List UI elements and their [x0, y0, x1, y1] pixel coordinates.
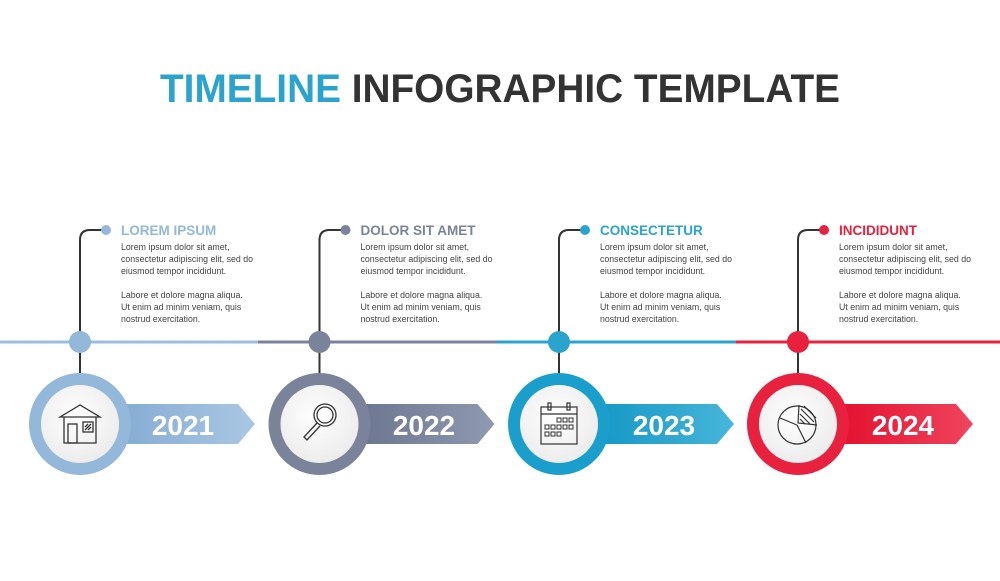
- heading: DOLOR SIT AMET: [360, 223, 476, 238]
- text block: Lorem ipsum dolor sit amet,: [839, 242, 948, 252]
- text block: Ut enim ad minim veniam, quis: [839, 302, 960, 312]
- text block: eiusmod tempor incididunt.: [600, 266, 705, 276]
- heading: CONSECTETUR: [600, 223, 703, 238]
- text block: eiusmod tempor incididunt.: [121, 266, 226, 276]
- text block: eiusmod tempor incididunt.: [839, 266, 944, 276]
- text block: Labore et dolore magna aliqua.: [121, 290, 243, 300]
- text block: nostrud exercitation.: [839, 314, 918, 324]
- step 4: 2024: 2024: [872, 410, 935, 441]
- text block: nostrud exercitation.: [600, 314, 679, 324]
- year banner: [120, 404, 255, 444]
- text block: nostrud exercitation.: [360, 314, 440, 324]
- text block: nostrud exercitation.: [121, 314, 200, 324]
- step 3: 2023: [508, 223, 734, 475]
- icon: magnifier: [304, 404, 336, 440]
- text block: consectetur adipiscing elit, sed do: [360, 254, 493, 264]
- text block: Labore et dolore magna aliqua.: [360, 290, 482, 300]
- year banner: [360, 404, 494, 444]
- year banner: [599, 404, 734, 444]
- text block: Labore et dolore magna aliqua.: [839, 290, 961, 300]
- text block: eiusmod tempor incididunt.: [360, 266, 466, 276]
- step 1: 2021: 2021: [152, 410, 214, 441]
- step 2: 2022: 2022: [393, 410, 455, 441]
- year banner: [838, 404, 973, 444]
- step 2: 2022: [268, 223, 494, 475]
- step 1: 2021: [29, 223, 255, 475]
- text block: consectetur adipiscing elit, sed do: [839, 254, 971, 264]
- step 3: 2023: 2023: [633, 410, 695, 441]
- heading: LOREM IPSUM: [121, 223, 216, 238]
- text block: consectetur adipiscing elit, sed do: [121, 254, 253, 264]
- text block: Lorem ipsum dolor sit amet,: [121, 242, 230, 252]
- step 4: 2024: [747, 223, 973, 475]
- icon: calendar: [541, 403, 577, 444]
- text block: consectetur adipiscing elit, sed do: [600, 254, 732, 264]
- text block: Ut enim ad minim veniam, quis: [600, 302, 721, 312]
- text block: Lorem ipsum dolor sit amet,: [360, 242, 469, 252]
- text block: Ut enim ad minim veniam, quis: [360, 302, 481, 312]
- text block: Ut enim ad minim veniam, quis: [121, 302, 242, 312]
- heading: INCIDIDUNT: [839, 223, 918, 238]
- icon: pie chart: [778, 405, 817, 444]
- icon: house: [60, 405, 100, 443]
- timeline line: [0, 340, 1000, 344]
- text block: Labore et dolore magna aliqua.: [600, 290, 722, 300]
- title: TIMELINE INFOGRAPHIC TEMPLATE: [160, 67, 840, 111]
- text block: Lorem ipsum dolor sit amet,: [600, 242, 709, 252]
